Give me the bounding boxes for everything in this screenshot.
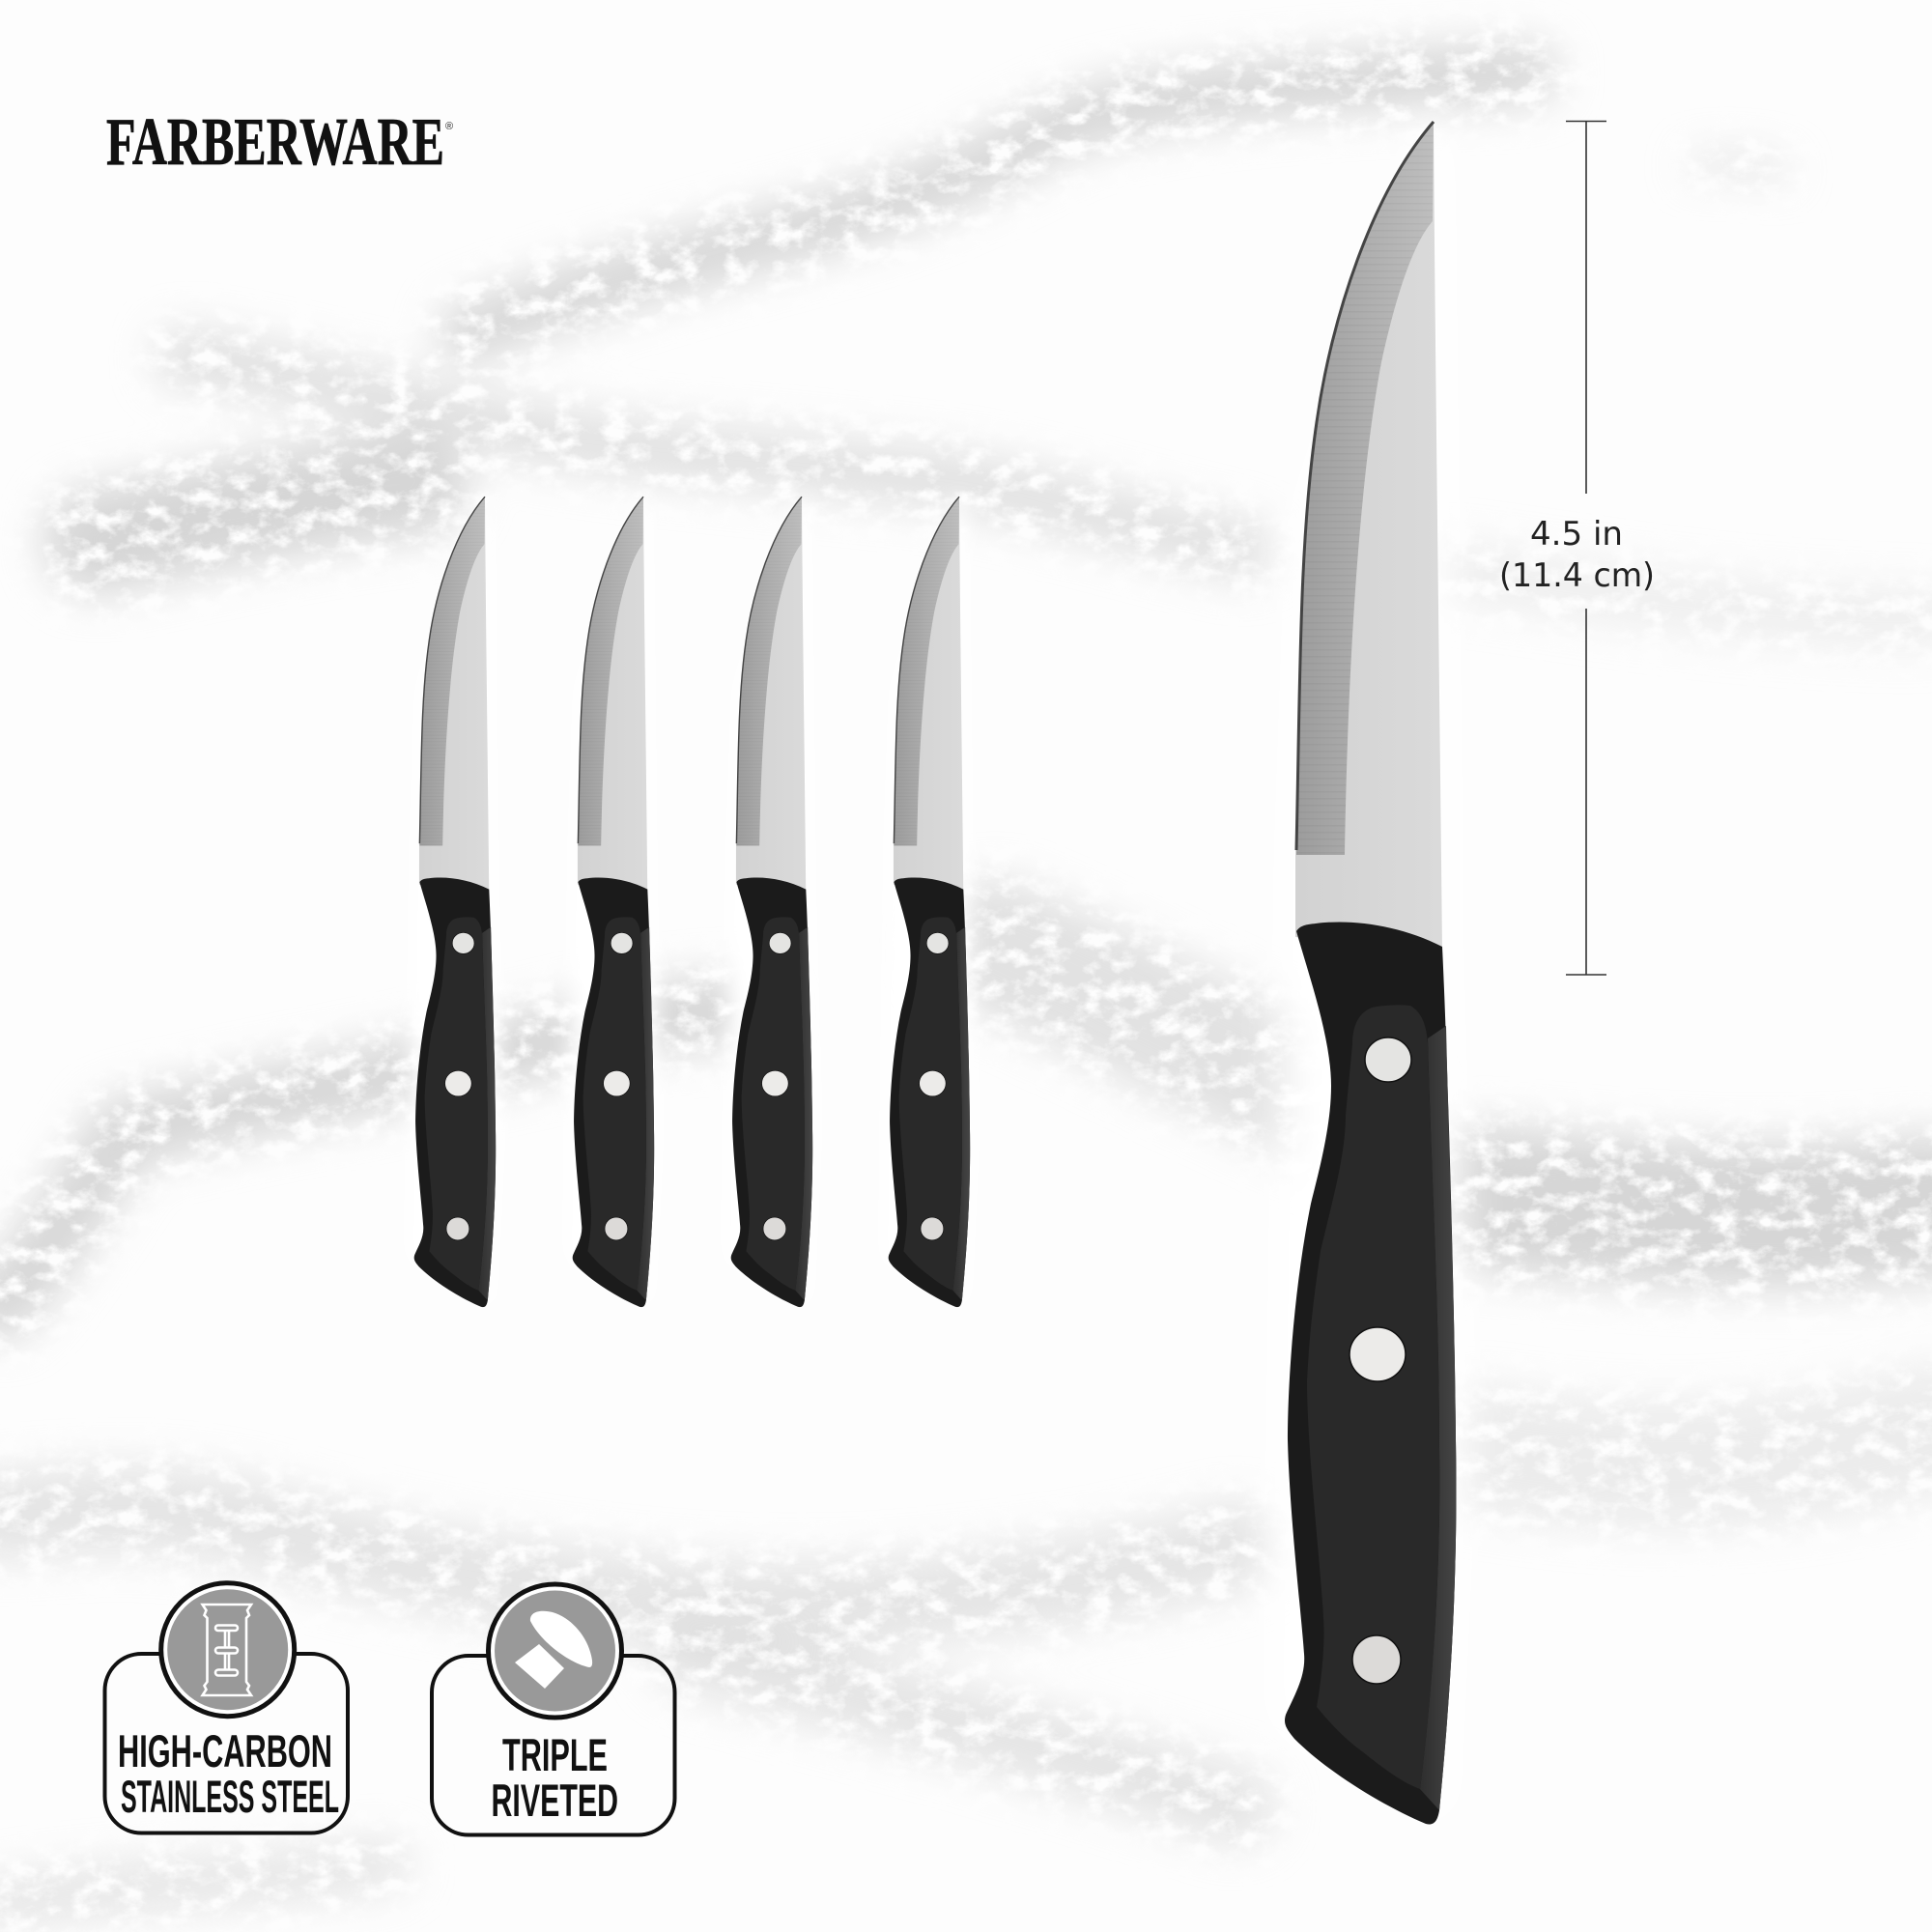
logo: Farberware: FARBERWARE: [106, 105, 444, 180]
badge: triple riveted: [432, 1584, 674, 1835]
dimension: blade length: (11.4 cm): [1499, 556, 1655, 595]
dimension: blade length: [1499, 122, 1655, 975]
dimension: blade length: 4.5 in: [1530, 515, 1623, 554]
small knife 2: [573, 497, 654, 1307]
small knife 1: [414, 497, 496, 1307]
icon: razor blade: [203, 1605, 251, 1695]
large knife: [1285, 122, 1456, 1824]
small knife 3: [731, 497, 812, 1307]
badge: triple riveted: RIVETED: [491, 1775, 618, 1826]
icon: rivet: [515, 1611, 592, 1689]
logo: Farberware: ®: [445, 121, 453, 132]
badge: high-carbon stainless steel: [104, 1583, 348, 1833]
badge: high-carbon stainless steel: HIGH-CARBON: [118, 1725, 332, 1776]
badge: triple riveted: TRIPLE: [502, 1729, 608, 1780]
small knife 4: [889, 497, 970, 1307]
badge: high-carbon stainless steel: STAINLESS STEEL: [121, 1771, 339, 1822]
